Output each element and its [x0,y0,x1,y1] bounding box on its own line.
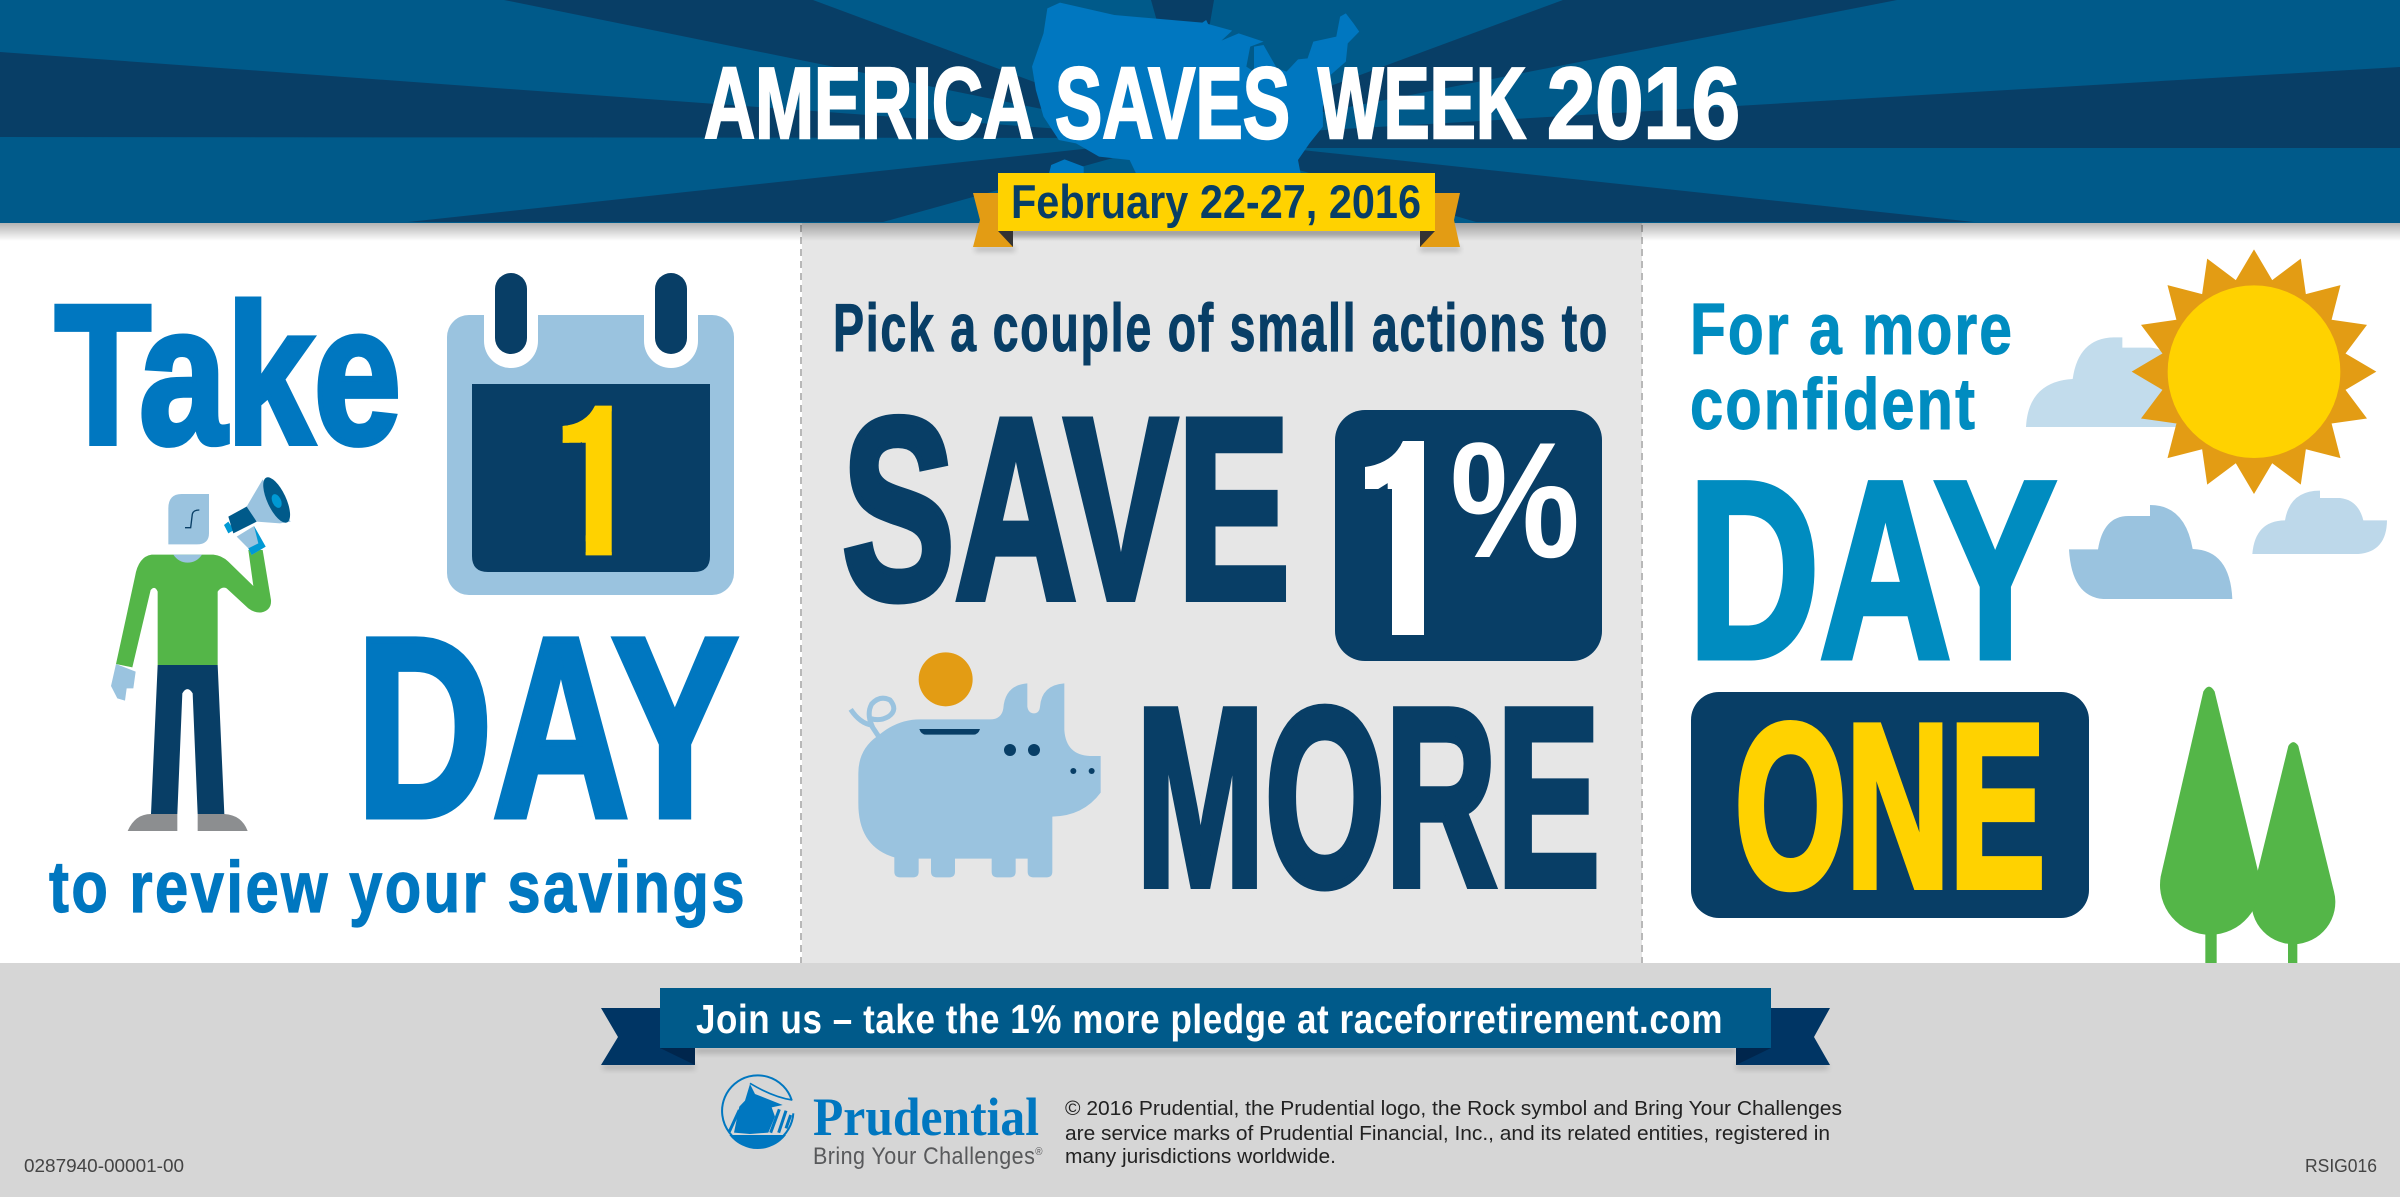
text: legal notice: are service marks of Prudential Financial, Inc., and its related entities, registered in [1065,1123,1830,1145]
logo wordmark: Prudential: Prudential [813,1087,1039,1147]
text: Pick a couple of small actions to: Pick a couple of small actions to [833,290,1609,366]
title: SAVES [1055,48,1290,160]
title: WEEK [1318,48,1526,160]
text: For a more confident: For a more [1690,290,2014,370]
icon: person with megaphone [111,474,296,831]
title [704,48,1740,160]
title: 2016 [1547,48,1740,160]
heading: Take: Take [55,264,401,485]
icon: calendar: 1 [536,358,659,606]
heading: DAY (left): DAY [356,585,738,871]
text: job code: 0287940-00001-00 [24,1156,184,1176]
text: For a more confident [1690,290,2014,445]
ribbon: pledge call to action: Join us – take the 1% more pledge at raceforretirement.com [696,996,1723,1042]
icon: map of the United States [1032,3,1359,180]
title: AMERICA [704,48,1034,160]
heading: SAVE: SAVE [842,364,1290,653]
callout: ONE box: ONE [1735,677,2045,936]
panel: right white background [1642,223,2400,963]
panel: footer band [0,963,2400,1197]
heading: DAY (right): DAY [1688,430,2056,711]
text: legal notice [1065,1098,1842,1168]
callout: 1% box: 1 [1326,376,1487,700]
ribbon: date [973,173,1460,251]
callout: 1% box: % [1450,408,1580,592]
panel: left white background [0,223,802,963]
panel: center grey background [802,223,1642,963]
tagline: Bring Your Challenges: ® [1035,1146,1043,1158]
callout: ONE box [1691,677,2089,936]
text: RSIG code: RSIG016 [2305,1156,2377,1176]
ribbon: pledge call to action [601,988,1830,1069]
heading: MORE: MORE [1136,655,1600,939]
icon: piggy bank with coin [851,652,1101,877]
text: For a more confident: confident [1690,365,1977,445]
text: legal notice: © 2016 Prudential, the Prudential logo, the Rock symbol and Bring Your Challenges [1065,1098,1842,1120]
icon: Prudential rock logo [722,1075,793,1149]
icon: trees [2160,687,2335,963]
tagline: Bring Your Challenges: Bring Your Challenges [813,1143,1061,1170]
ribbon: date: February 22-27, 2016 [1011,175,1421,228]
text: to review your savings: to review your savings [49,848,747,928]
icon: sun and clouds [2026,249,2387,599]
text: legal notice: many jurisdictions worldwide. [1065,1146,1336,1168]
icon: calendar [447,273,734,606]
panel: header banner with rays [0,0,2400,241]
callout: 1% box [1335,410,1602,661]
